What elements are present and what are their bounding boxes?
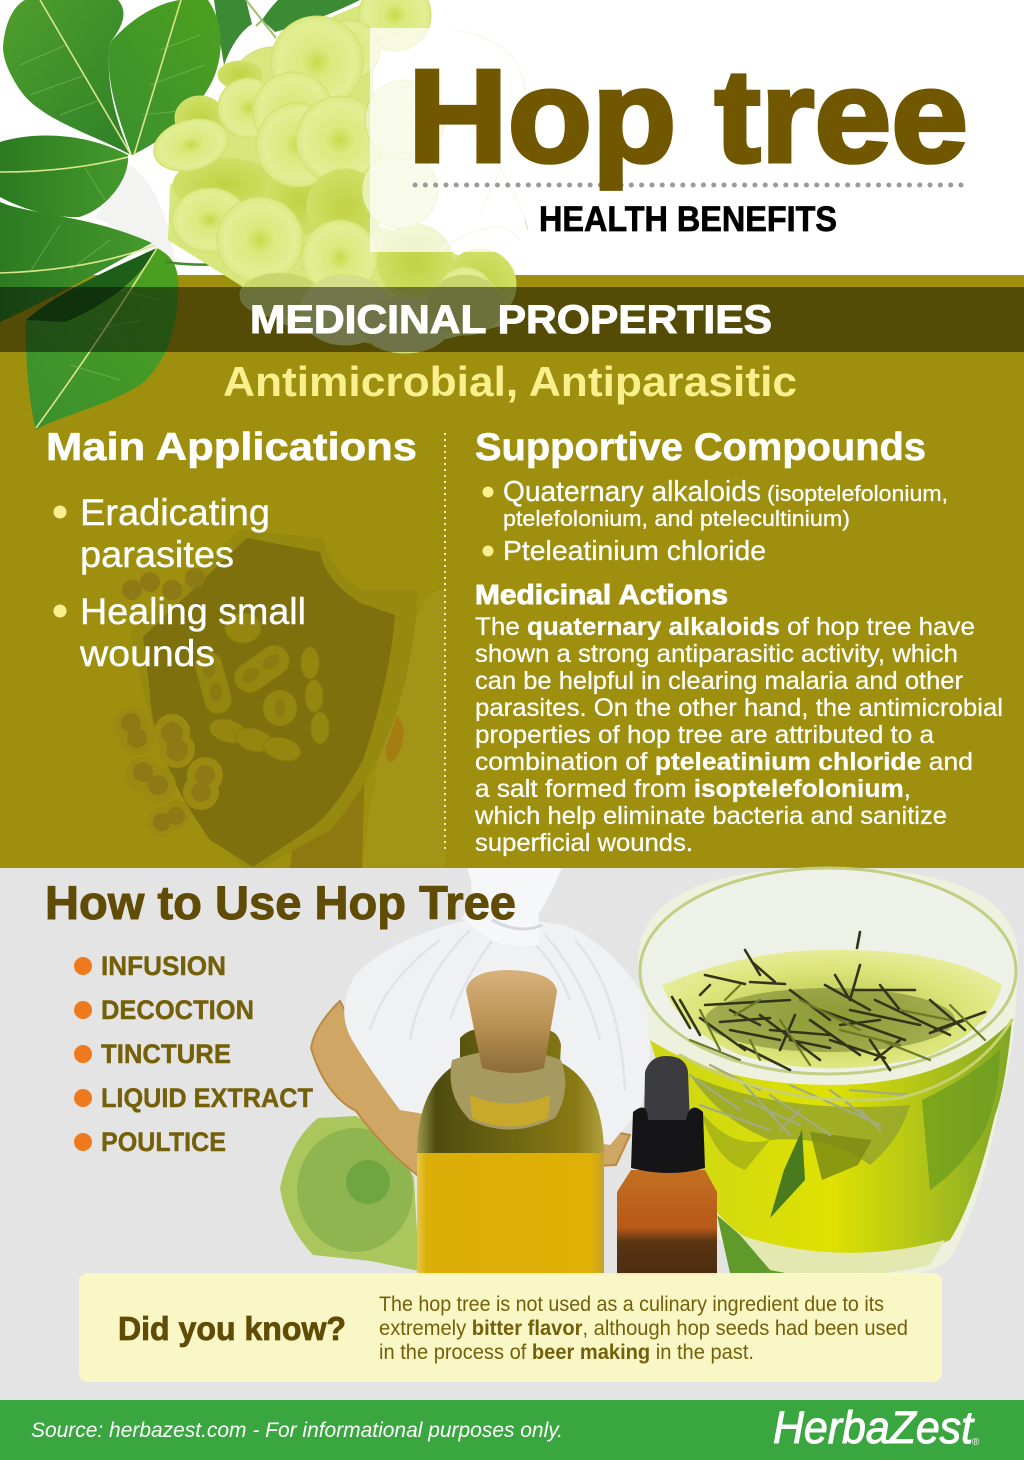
- text block: medicinal actions: a salt formed from isoptelefolonium ,: [475, 775, 911, 803]
- callout text: extremely bitter flavor, although hop seeds had been used: [379, 1317, 908, 1340]
- background: grey usage panel: [0, 868, 1024, 1400]
- text block: medicinal actions: combination of pteleatinium chloride and: [475, 748, 973, 776]
- dropper bottle: [617, 1056, 717, 1275]
- list: compounds: Quaternary alkaloids: [503, 476, 761, 508]
- tea glass: [638, 868, 1018, 1278]
- subheading: antimicrobial: Antimicrobial, Antiparasitic: [223, 358, 797, 405]
- floating herb needles: [672, 932, 1012, 1135]
- text block: medicinal actions: The quaternary alkaloids of hop tree have: [475, 613, 975, 641]
- divider dots: [415, 182, 966, 188]
- column: supportive compounds: [474, 426, 1003, 857]
- source note: Source: herbazest.com - For informational purposes only.: [31, 1418, 563, 1442]
- list: compounds: [482, 476, 948, 566]
- text block: medicinal actions: shown a strong antiparasitic activity, which: [475, 640, 958, 668]
- list: compounds: Pteleatinium chloride: [503, 535, 766, 566]
- leaf veins: [0, 0, 181, 428]
- heading: main applications: Main Applications: [46, 426, 417, 469]
- title: Hop tree: [408, 42, 968, 190]
- list: preparation forms: TINCTURE: [101, 1039, 231, 1069]
- callout text: [379, 1293, 908, 1364]
- list: preparation forms: LIQUID EXTRACT: [101, 1083, 313, 1113]
- list: applications: Eradicating: [80, 492, 270, 533]
- background: white header: [0, 0, 1024, 275]
- list: preparation forms: [74, 951, 313, 1157]
- poultice: [344, 868, 650, 1145]
- text block: medicinal actions: can be helpful in clearing malaria and other: [475, 667, 963, 695]
- heading: how to use: How to Use Hop Tree: [45, 876, 516, 929]
- text block: medicinal actions: parasites. On the other hand, the antimicrobial: [475, 694, 1003, 722]
- hop seeds: [148, 0, 516, 353]
- text block: medicinal actions: properties of hop tree are attributed to a: [475, 721, 934, 749]
- subtitle: HEALTH BENEFITS: [539, 200, 837, 239]
- list: applications: parasites: [80, 534, 234, 575]
- back leaves: [214, 0, 360, 65]
- heading: supportive compounds: Supportive Compounds: [475, 426, 926, 469]
- callout: did you know: [79, 1273, 942, 1382]
- callout text: The hop tree is not used as a culinary ingredient due to its: [379, 1293, 884, 1316]
- list: applications: Healing small: [80, 591, 306, 632]
- list: preparation forms: INFUSION: [101, 951, 226, 981]
- callout heading: Did you know?: [118, 1310, 346, 1347]
- illustration: poultice, oil bottle, dropper and tea: [280, 868, 1018, 1278]
- leaf: [280, 1116, 419, 1271]
- text block: medicinal actions: [474, 613, 1003, 857]
- hop stalks: [440, 30, 528, 250]
- heading: medicinal properties: MEDICINAL PROPERTIES: [250, 298, 772, 342]
- footer: [0, 1400, 1024, 1460]
- list: applications: [54, 492, 306, 674]
- list: applications: wounds: [79, 633, 215, 674]
- front leaves: [0, 0, 222, 430]
- floor shadow: [95, 165, 175, 268]
- heading: translucent title panel: [370, 28, 525, 252]
- illustration: shield with microbes: [113, 530, 445, 868]
- column divider: [444, 433, 446, 852]
- column: main applications: [46, 426, 417, 674]
- text block: medicinal actions: superficial wounds.: [475, 829, 693, 857]
- text block: medicinal actions: which help eliminate bacteria and sanitize: [474, 802, 947, 830]
- illustration: hop tree leaves and seed cluster: [0, 0, 528, 430]
- heading: medicinal actions: Medicinal Actions: [475, 579, 728, 610]
- oil bottle: [417, 970, 604, 1275]
- callout text: in the process of beer making in the past.: [379, 1341, 754, 1364]
- logo: HerbaZest: HerbaZest: [773, 1402, 975, 1453]
- logo: HerbaZest: ®: [972, 1437, 980, 1448]
- list: preparation forms: DECOCTION: [101, 995, 254, 1025]
- basket: [311, 1001, 630, 1175]
- list: compounds: ptelefolonium, and ptelecultinium): [503, 506, 850, 531]
- cork: [466, 970, 557, 1073]
- section band: medicinal properties: [0, 287, 1024, 352]
- list: preparation forms: POULTICE: [101, 1127, 226, 1157]
- glass rim and interior: [640, 868, 1016, 1074]
- list: compounds: (isoptelefolonium,: [767, 481, 948, 506]
- background: olive medicinal panel: [0, 275, 1024, 868]
